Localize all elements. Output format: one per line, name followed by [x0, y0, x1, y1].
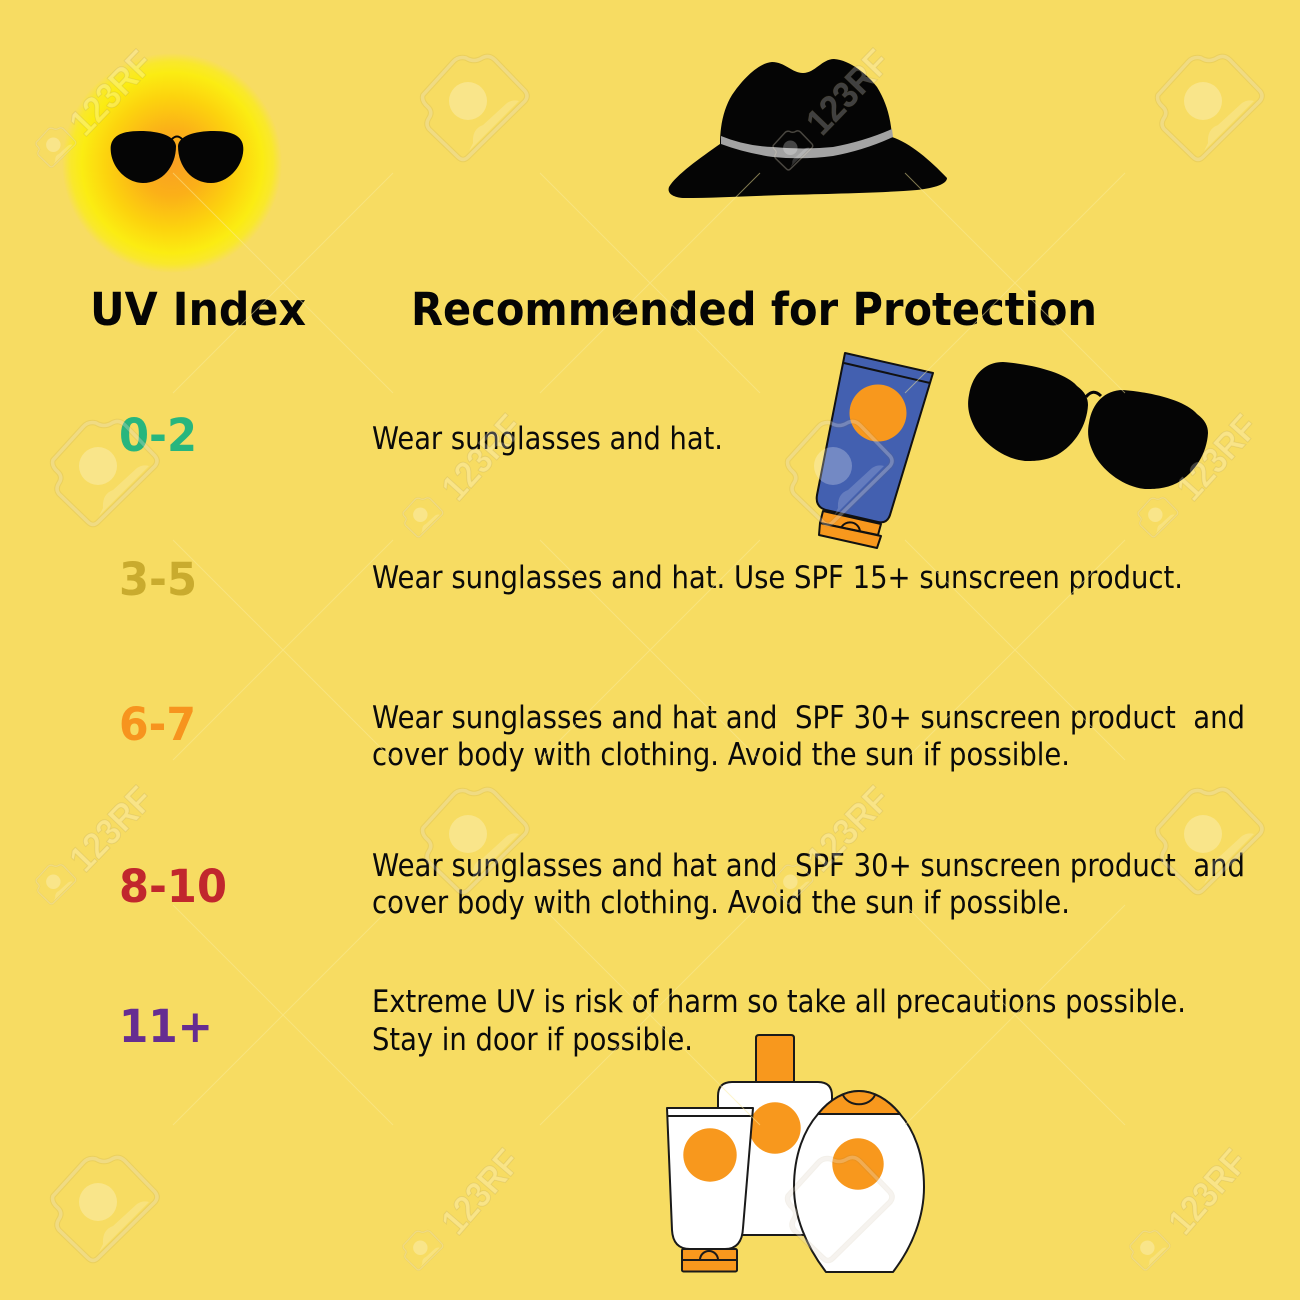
icon: blue sunscreen tube — [817, 353, 933, 548]
range: 8-10: 8-10 — [119, 860, 227, 913]
range: 11+: 11+ — [119, 1000, 213, 1053]
text: 6-7 advice — [372, 700, 1245, 773]
text: 6-7 advice: cover body with clothing. Avoid the sun if possible. — [372, 737, 1070, 773]
watermark wordmarks: 123RF — [1160, 1141, 1255, 1242]
text: 11+ advice — [372, 984, 1186, 1058]
range: 0-2: 0-2 — [119, 409, 197, 462]
watermark wordmarks: 123RF — [433, 1141, 528, 1242]
icon: sun with sunglasses — [62, 53, 282, 273]
text: 8-10 advice — [372, 848, 1245, 921]
text: 11+ advice: Extreme UV is risk of harm so take all precautions possible. — [372, 984, 1186, 1020]
text: 3-5 advice: Wear sunglasses and hat. Use SPF 15+ sunscreen product. — [372, 560, 1183, 596]
front tube — [667, 1108, 753, 1272]
text: 11+ advice: Stay in door if possible. — [372, 1022, 693, 1058]
text: 8-10 advice: cover body with clothing. Avoid the sun if possible. — [372, 885, 1070, 921]
watermark wordmarks: 123RF — [798, 778, 898, 880]
icon: sunscreen bottles — [667, 1035, 924, 1272]
text: 0-2 advice: Wear sunglasses and hat. — [372, 421, 723, 457]
watermark wordmarks: 123RF — [433, 407, 531, 508]
watermark wordmarks: 123RF — [61, 42, 161, 144]
heading: UV Index: UV Index — [90, 283, 306, 336]
icon: large sunglasses — [968, 362, 1208, 489]
range: 3-5: 3-5 — [119, 553, 197, 606]
watermark wordmarks: 123RF — [798, 41, 898, 143]
range: 6-7: 6-7 — [119, 698, 196, 751]
oval bottle — [794, 1091, 924, 1272]
watermark wordmarks: 123RF — [1168, 407, 1266, 508]
icon: hat — [669, 59, 947, 198]
heading: Recommended for Protection: Recommended for Protection — [411, 283, 1097, 336]
watermark wordmarks: 123RF — [61, 778, 161, 880]
back bottle — [718, 1035, 832, 1235]
